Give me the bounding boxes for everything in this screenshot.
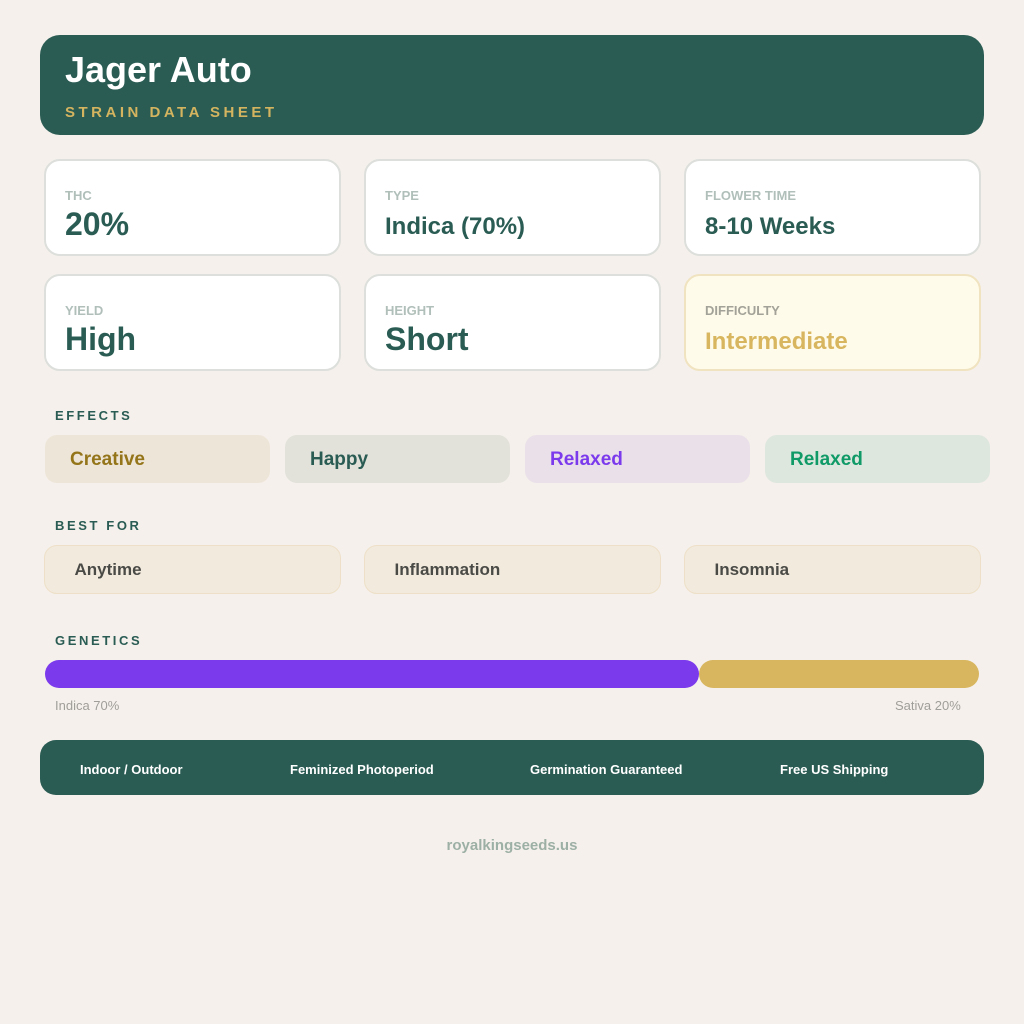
title: Jager Auto	[65, 49, 252, 90]
feature: indoor outdoor: Indoor / Outdoor	[80, 762, 183, 777]
flower time value: 8-10 Weeks	[705, 213, 835, 240]
effect chip: Relaxed purple	[525, 435, 750, 483]
best for heading: BEST FOR	[55, 518, 142, 533]
best for chip: Anytime	[44, 545, 341, 594]
best for chip: Inflammation	[364, 545, 661, 594]
footer features bar	[40, 740, 984, 795]
stat card: height	[364, 274, 661, 371]
genetics heading: GENETICS	[55, 633, 142, 648]
stat card: type	[364, 159, 661, 256]
flower time label: FLOWER TIME	[705, 188, 796, 203]
yield value: High	[65, 321, 136, 357]
stat card: yield	[44, 274, 341, 371]
feature: feminized: Feminized Photoperiod	[290, 762, 434, 777]
height label: HEIGHT	[385, 303, 434, 318]
header banner	[40, 35, 984, 135]
height value: Short	[385, 321, 469, 357]
type label: TYPE	[385, 188, 419, 203]
best for chip: Anytime: Anytime	[74, 560, 142, 578]
type value: Indica (70%)	[385, 213, 525, 240]
stat card: flower time	[684, 159, 981, 256]
effect chip: Creative: Creative	[70, 449, 145, 470]
difficulty value: Intermediate	[705, 328, 848, 355]
best for chip: Insomnia: Insomnia	[714, 560, 789, 578]
effect chip: Happy: Happy	[310, 449, 368, 470]
indica segment	[45, 660, 699, 688]
effect chip: Happy	[285, 435, 510, 483]
best for chip: Insomnia	[684, 545, 981, 594]
indica label: Indica 70%	[55, 698, 119, 713]
effect chip: Relaxed purple: Relaxed	[550, 449, 623, 470]
sativa segment	[699, 660, 979, 688]
website: royalkingseeds.us	[447, 837, 577, 854]
sativa label: Sativa 20%	[895, 698, 961, 713]
difficulty label: DIFFICULTY	[705, 303, 780, 318]
effects heading: EFFECTS	[55, 408, 132, 423]
THC value: 20%	[65, 206, 129, 242]
yield label: YIELD	[65, 303, 103, 318]
effect chip: Creative	[45, 435, 270, 483]
stat card: THC	[44, 159, 341, 256]
genetics bar	[45, 660, 979, 688]
THC label: THC	[65, 188, 92, 203]
best for chip: Inflammation: Inflammation	[394, 560, 500, 578]
feature: germination: Germination Guaranteed	[530, 762, 682, 777]
subtitle: STRAIN DATA SHEET	[65, 104, 278, 121]
effect chip: Relaxed green	[765, 435, 990, 483]
feature: shipping: Free US Shipping	[780, 762, 888, 777]
stat card: difficulty	[684, 274, 981, 371]
effect chip: Relaxed green: Relaxed	[790, 449, 863, 470]
